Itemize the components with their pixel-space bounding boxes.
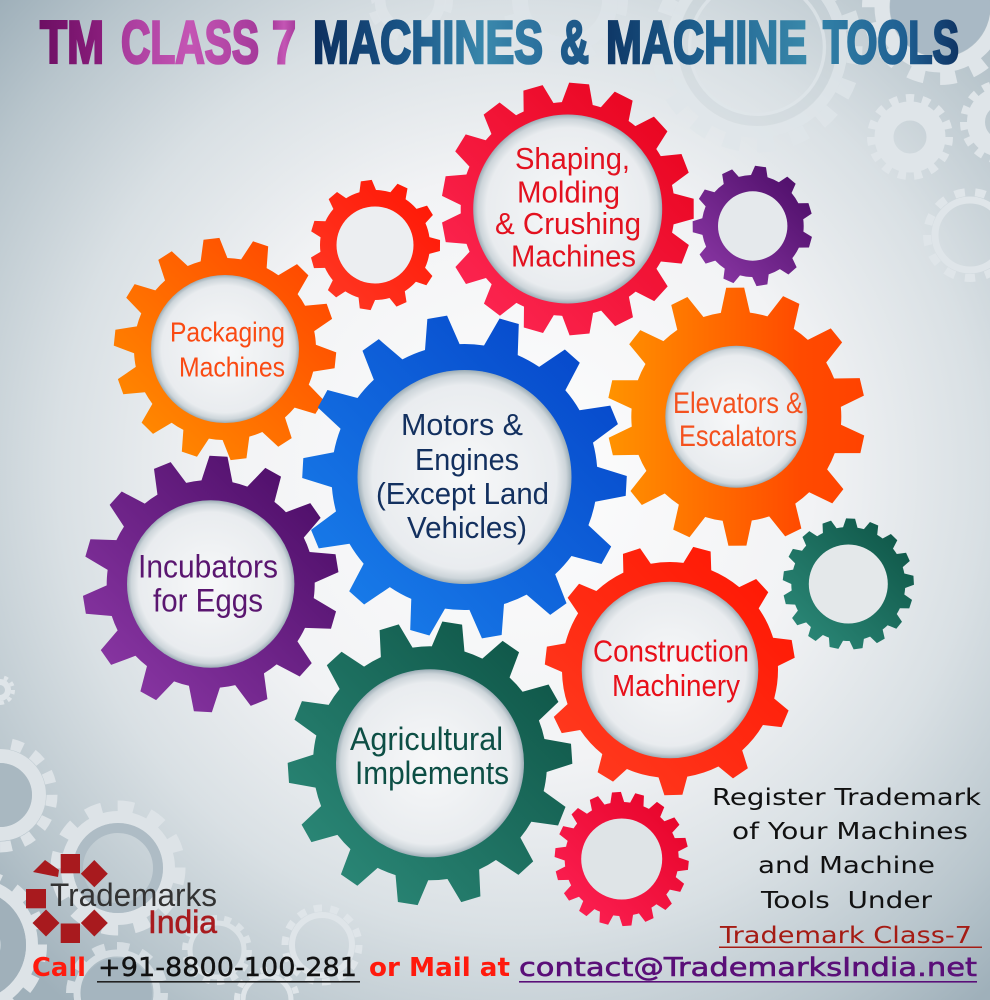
gear: packaging machines — [110, 234, 340, 464]
title: CLASS — [121, 9, 259, 76]
label: construction machinery: Machinery — [612, 668, 740, 703]
label: shaping, molding and crushing machines — [495, 141, 641, 274]
registration callout: Register Trademark — [712, 785, 982, 811]
label: construction machinery: Construction — [593, 634, 749, 669]
title — [40, 9, 959, 76]
title: MACHINE — [606, 9, 807, 76]
gear: small teal — [780, 516, 917, 652]
gear: agricultural implements — [285, 618, 575, 908]
gear: incubators for eggs — [80, 453, 342, 715]
title: TM — [40, 9, 104, 76]
gear: elevators and escalators — [605, 285, 867, 550]
logo: Trademarks India: India — [148, 904, 217, 940]
label: motors and engines: (Except Land — [376, 476, 549, 511]
registration callout: of Your Machines — [732, 819, 968, 845]
label: motors and engines: Motors & — [401, 407, 523, 442]
contact line: +91-8800-100-281 — [98, 953, 357, 983]
label: incubators for eggs — [138, 549, 278, 619]
label: elevators and escalators: Elevators & — [673, 387, 803, 420]
logo: Trademarks India: Trademarks — [50, 877, 217, 913]
gear: small red — [311, 180, 440, 310]
contact line: Call — [32, 953, 86, 983]
registration callout: Tools Under — [760, 888, 933, 914]
registration callout: Trademark Class-7 — [719, 923, 972, 949]
label: incubators for eggs: for Eggs — [153, 583, 263, 619]
label: agricultural implements — [350, 721, 509, 791]
gear: motors and engines — [298, 310, 632, 644]
label: elevators and escalators — [673, 387, 803, 453]
logo: Trademarks India — [26, 854, 217, 943]
registration callout: and Machine — [758, 853, 935, 879]
label: shaping, molding and crushing machines: & Crushing — [495, 206, 641, 241]
label: motors and engines: Engines — [415, 442, 519, 477]
contact line — [32, 953, 977, 983]
title: 7 — [272, 9, 296, 76]
registration callout — [712, 785, 982, 949]
gear: shaping, molding and crushing machines — [440, 80, 696, 338]
label: shaping, molding and crushing machines: Machines — [511, 239, 636, 274]
title: MACHINES — [313, 9, 543, 76]
label: agricultural implements: Agricultural — [350, 721, 503, 757]
label: motors and engines: Vehicles) — [407, 510, 527, 545]
contact line: contact@TrademarksIndia.net — [519, 953, 977, 983]
label: packaging machines: Machines — [179, 352, 285, 383]
label: construction machinery — [593, 634, 749, 703]
gear: small purple — [690, 162, 815, 290]
label: packaging machines — [170, 317, 285, 383]
contact line: or Mail at — [369, 953, 510, 983]
label: shaping, molding and crushing machines: Shaping, — [515, 141, 630, 176]
label: incubators for eggs: Incubators — [138, 549, 278, 585]
label: elevators and escalators: Escalators — [679, 420, 797, 453]
label: shaping, molding and crushing machines: Molding — [517, 175, 620, 210]
label: motors and engines — [376, 407, 549, 545]
gear: small crimson — [552, 789, 692, 929]
title: & — [560, 9, 589, 76]
label: packaging machines: Packaging — [170, 317, 285, 348]
label: agricultural implements: Implements — [355, 755, 509, 791]
gear: construction machinery — [540, 540, 800, 800]
